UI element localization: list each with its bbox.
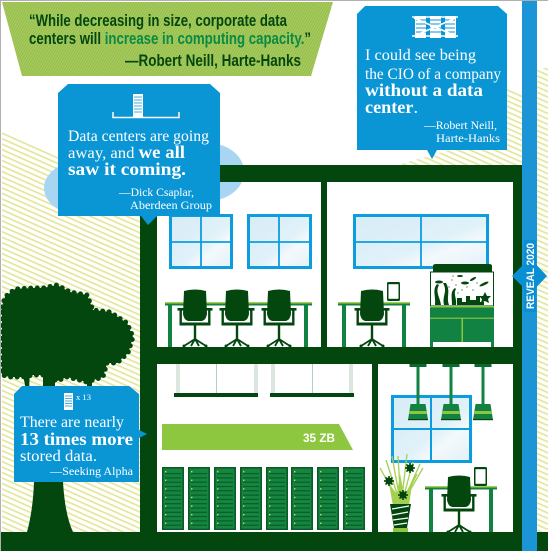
- chair 2: [220, 290, 254, 348]
- conference desk with three chairs: [165, 290, 312, 348]
- server racks: [162, 467, 365, 530]
- callout text: 13 times more: [20, 429, 133, 449]
- chair 1: [178, 290, 212, 348]
- icon: server times 13: x 13: [76, 393, 91, 402]
- chair 5: [442, 476, 476, 534]
- canopy: [2, 285, 133, 382]
- callout text: —Seeking Alpha: [49, 464, 134, 478]
- tablet: [387, 282, 400, 301]
- callout text: the CIO of a company: [365, 66, 501, 83]
- callout text: Harte-Hanks: [436, 131, 500, 145]
- lower desk with chair and tablet: [425, 467, 497, 534]
- window upper middle: [248, 215, 311, 268]
- callout: 13 times more stored data: [14, 386, 147, 482]
- banner quote text: centers will increase in computing capacity.”: [29, 29, 311, 48]
- callout text: without a data: [365, 80, 483, 100]
- desk with chair and tablet: [338, 282, 410, 348]
- icon: server on tray: [113, 94, 179, 118]
- banner quote text: “While decreasing in size, corporate data: [29, 11, 287, 30]
- callout: Data centers going away: [58, 84, 220, 225]
- hatched strip at right edge: [537, 68, 548, 532]
- cloud: [44, 143, 244, 216]
- callout text: stored data.: [20, 448, 97, 465]
- callout text: There are nearly: [20, 414, 124, 431]
- callout text: away, and we all: [68, 142, 185, 162]
- callout text: [20, 414, 134, 478]
- banner quote text: —Robert Neill, Harte-Hanks: [125, 51, 301, 70]
- Reveal 2020 label: REVEAL 2020: [525, 243, 537, 309]
- callout: CIO without a data center: [357, 6, 507, 159]
- window upper right: [354, 215, 488, 268]
- data volume bar: [162, 424, 353, 450]
- trunk: [27, 482, 73, 532]
- callout text: Data centers are going: [68, 128, 209, 145]
- building structure: [1, 165, 548, 551]
- callout text: —Dick Csaplar,: [118, 185, 194, 199]
- chair 4: [354, 290, 390, 348]
- icon: servers crossed out: [412, 16, 458, 38]
- callout text: center.: [365, 97, 418, 117]
- callout text: —Robert Neill,: [423, 118, 497, 132]
- window upper left: [170, 215, 232, 268]
- chair 3: [262, 290, 296, 348]
- hatched sky right of building: [397, 85, 522, 165]
- aquarium: [430, 264, 494, 347]
- quote banner: [2, 2, 333, 76]
- callout text: [365, 47, 501, 145]
- hanging shelf left: [174, 364, 258, 397]
- hanging shelf right: [270, 364, 354, 397]
- blue strip with Reveal 2020 tag: [512, 1, 547, 551]
- potted plant: [380, 454, 423, 532]
- callout text: saw it coming.: [68, 159, 186, 179]
- window lower: [392, 396, 471, 462]
- hatched sky left: [2, 130, 140, 532]
- callout text: [68, 128, 212, 212]
- banner quote text: [29, 11, 311, 70]
- bar label: 35 ZB: [303, 433, 335, 445]
- tree: [2, 285, 133, 532]
- callout text: Aberdeen Group: [130, 198, 212, 212]
- tablet: [474, 467, 487, 486]
- callout text: I could see being: [365, 47, 476, 64]
- upper branches: [22, 370, 92, 390]
- pendant lamps: [408, 364, 493, 420]
